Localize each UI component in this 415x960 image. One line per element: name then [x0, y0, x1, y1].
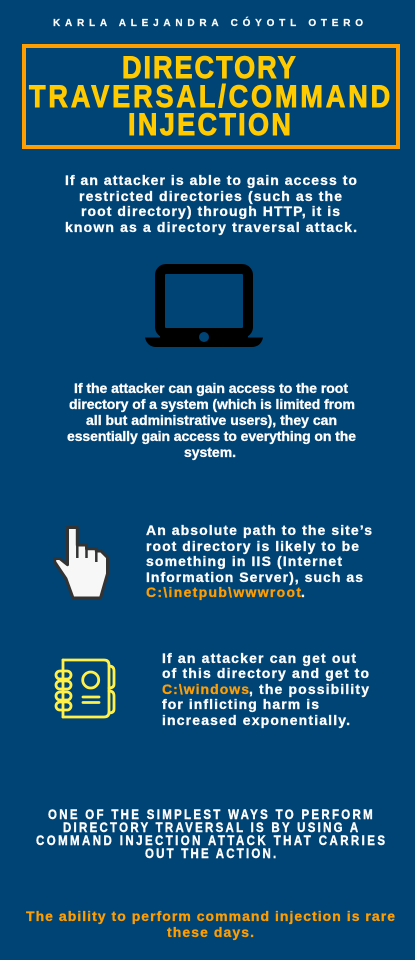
- icon: pointing hand cursor: [55, 528, 108, 598]
- uppercase statement: COMMAND INJECTION ATTACK THAT CARRIES: [36, 832, 385, 848]
- uppercase statement: ONE OF THE SIMPLEST WAYS TO PERFORM: [48, 806, 373, 822]
- root directory text: essentially gain access to everything on the: [67, 428, 356, 444]
- absolute path text: [146, 522, 372, 600]
- icon: laptop: [145, 269, 263, 347]
- escape directory text: for inflicting harm is: [162, 696, 319, 712]
- root directory text: all but administrative users), they can: [86, 412, 337, 428]
- title: DIRECTORY: [122, 50, 296, 86]
- closing note: The ability to perform command injection is rare: [26, 908, 395, 924]
- absolute path text: C:\inetpub\wwwroot: [146, 584, 301, 600]
- title: [29, 50, 390, 143]
- absolute path text: root directory is likely to be: [146, 538, 359, 554]
- escape directory text: of this directory and get to: [162, 665, 369, 681]
- closing note: [26, 908, 395, 940]
- absolute path text: something in IIS (Internet: [146, 553, 342, 569]
- title: TRAVERSAL/COMMAND: [29, 79, 390, 115]
- intro text: [65, 172, 357, 235]
- uppercase statement: DIRECTORY TRAVERSAL IS BY USING A: [63, 819, 358, 835]
- escape directory text: , the possibility: [249, 681, 369, 697]
- absolute path text: An absolute path to the site’s: [146, 522, 372, 538]
- escape directory text: [162, 650, 369, 728]
- root directory text: [67, 380, 356, 460]
- root directory text: system.: [184, 444, 236, 460]
- absolute path text: Information Server), such as: [146, 569, 363, 585]
- escape directory text: C:\windows: [162, 681, 249, 697]
- root directory text: directory of a system (which is limited from: [69, 396, 355, 412]
- closing note: these days.: [167, 924, 254, 940]
- escape directory text: If an attacker can get out: [162, 650, 356, 666]
- intro text: root directory) through HTTP, it is: [81, 203, 340, 219]
- author name: KARLA ALEJANDRA CÓYOTL OTERO: [53, 16, 363, 29]
- absolute path text: .: [301, 584, 305, 600]
- intro text: restricted directories (such as the: [79, 188, 342, 204]
- icon: yellow notebook: [56, 660, 114, 717]
- root directory text: If the attacker can gain access to the root: [74, 380, 348, 396]
- intro text: If an attacker is able to gain access to: [65, 172, 357, 188]
- uppercase statement: OUT THE ACTION.: [145, 845, 276, 861]
- title box: [24, 46, 398, 147]
- intro text: known as a directory traversal attack.: [65, 219, 357, 235]
- title: INJECTION: [128, 107, 291, 143]
- escape directory text: increased exponentially.: [162, 712, 350, 728]
- uppercase statement: [36, 806, 385, 861]
